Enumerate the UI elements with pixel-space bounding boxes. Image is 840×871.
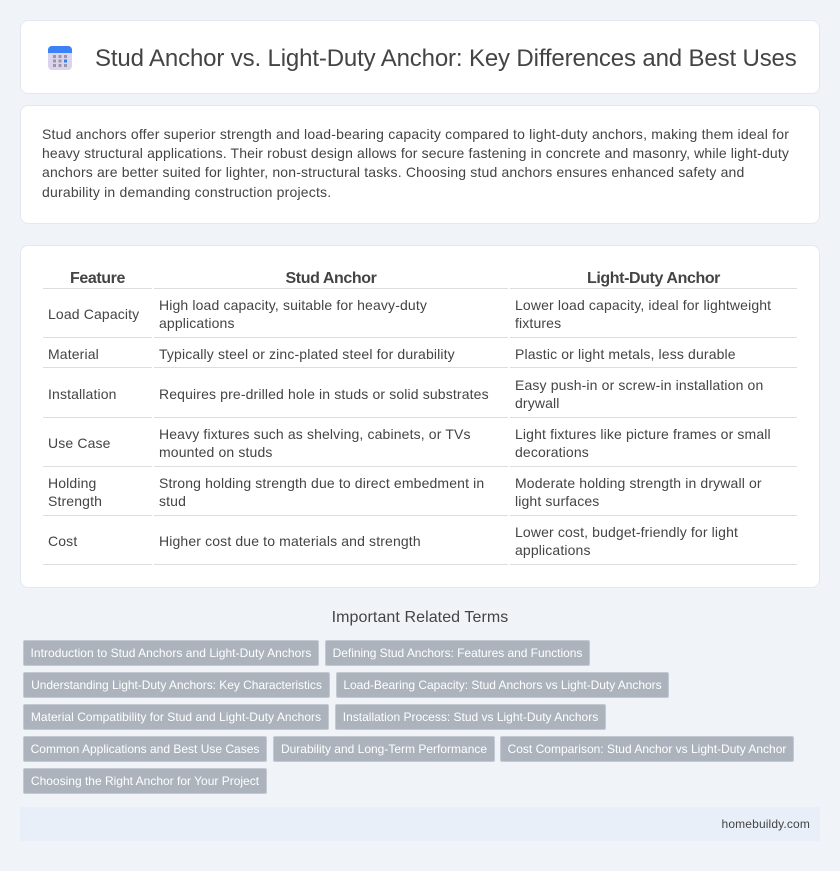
intro text: heavy structural applications. Their robust design allows for secure fastening in concrete and masonry, while light-duty [42, 145, 789, 161]
row: Use Case: decorations [515, 444, 589, 460]
row: Use Case: mounted on studs [159, 444, 273, 460]
related term tags [23, 640, 794, 794]
heading: Important Related Terms: Important Related Terms [332, 609, 508, 626]
tag [500, 736, 794, 762]
footer source text: homebuildy.com [722, 817, 810, 831]
row: Use Case [48, 426, 771, 460]
row: Cost [48, 524, 738, 558]
tag: Cost Comparison: Stud Anchor vs Light-Duty Anchor [508, 742, 786, 756]
tag: Common Applications and Best Use Cases [31, 742, 259, 756]
tag: Material Compatibility for Stud and Light-Duty Anchors [31, 710, 321, 724]
row: Holding Strength: Strong holding strength due to direct embedment in [159, 475, 484, 491]
tag [335, 704, 606, 730]
row: Load Capacity: applications [159, 315, 235, 331]
intro text: anchors are better suited for lighter, non-structural tasks. Choosing stud anchors ensures enhanced safety and [42, 164, 744, 180]
tag [336, 672, 669, 698]
icon: calendar [48, 46, 72, 70]
tag [23, 768, 267, 794]
row: Holding Strength: stud [159, 493, 186, 509]
row: Cost: Cost [48, 533, 77, 549]
table card [20, 245, 820, 588]
tag [23, 736, 267, 762]
row: Material: Plastic or light metals, less durable [515, 346, 736, 362]
footer bar [20, 807, 820, 841]
tag [325, 640, 590, 666]
row: Use Case: Light fixtures like picture frames or small [515, 426, 771, 442]
intro text [42, 126, 789, 200]
row: Installation: drywall [515, 395, 560, 411]
row: Holding Strength: Strength [48, 493, 102, 509]
row: Material: Material [48, 346, 99, 362]
header: Feature: Feature [70, 270, 125, 287]
row: Cost: applications [515, 542, 591, 558]
row: Load Capacity: fixtures [515, 315, 561, 331]
tag: Understanding Light-Duty Anchors: Key Characteristics [31, 678, 322, 692]
row: Holding Strength: Holding [48, 475, 96, 491]
row: Use Case: Use Case [48, 435, 111, 451]
row: Installation: Installation [48, 386, 117, 402]
intro text: Stud anchors offer superior strength and load-bearing capacity compared to light-duty anchors, making them ideal for [42, 126, 789, 142]
header card [20, 20, 820, 94]
tag [23, 640, 319, 666]
row: Material [48, 346, 736, 362]
tag: Durability and Long-Term Performance [281, 742, 487, 756]
header: Stud Anchor: Stud Anchor [286, 270, 376, 287]
row: Load Capacity [48, 297, 771, 331]
tag: Introduction to Stud Anchors and Light-Duty Anchors [31, 646, 311, 660]
row: Cost: Lower cost, budget-friendly for light [515, 524, 738, 540]
row: Load Capacity: Lower load capacity, ideal for lightweight [515, 297, 771, 313]
intro card [20, 105, 820, 224]
tag [23, 704, 329, 730]
row: Installation [48, 377, 763, 411]
row: Installation: Easy push-in or screw-in installation on [515, 377, 763, 393]
tag: Choosing the Right Anchor for Your Project [31, 774, 259, 788]
tag: Load-Bearing Capacity: Stud Anchors vs Light-Duty Anchors [343, 678, 662, 692]
tag: Defining Stud Anchors: Features and Functions [333, 646, 582, 660]
intro text: durability in demanding construction projects. [42, 184, 331, 200]
title: Stud Anchor vs. Light-Duty Anchor: Key Differences and Best Uses [95, 45, 797, 72]
row: Cost: Higher cost due to materials and strength [159, 533, 421, 549]
row: Holding Strength [48, 475, 762, 509]
tag [273, 736, 495, 762]
row: Material: Typically steel or zinc-plated steel for durability [159, 346, 455, 362]
row: Holding Strength: Moderate holding strength in drywall or [515, 475, 762, 491]
row: Use Case: Heavy fixtures such as shelving, cabinets, or TVs [159, 426, 471, 442]
comparison table [43, 270, 797, 565]
row: Load Capacity: High load capacity, suitable for heavy-duty [159, 297, 427, 313]
tag: Installation Process: Stud vs Light-Duty Anchors [343, 710, 598, 724]
row: Load Capacity: Load Capacity [48, 306, 139, 322]
header: Light-Duty Anchor: Light-Duty Anchor [587, 270, 720, 287]
tag [23, 672, 330, 698]
row: Holding Strength: light surfaces [515, 493, 599, 509]
row: Installation: Requires pre-drilled hole in studs or solid substrates [159, 386, 489, 402]
